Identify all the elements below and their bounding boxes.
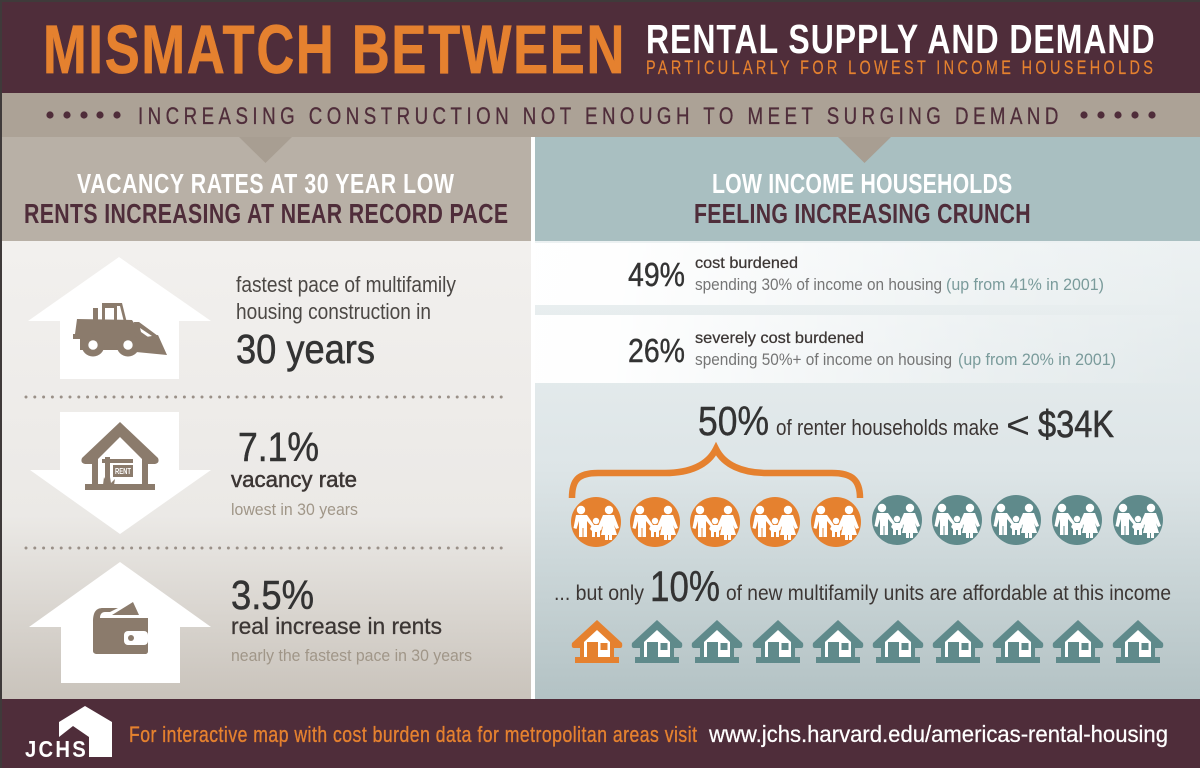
- row: 26% severely cost burdened: [535, 315, 1200, 383]
- text: vacancy rate: vacancy rate: [231, 467, 357, 492]
- teal house 2: [692, 620, 742, 663]
- banner pointer right: [838, 137, 891, 163]
- $34K: $34K: [1038, 404, 1114, 446]
- orange family 1: [571, 497, 621, 547]
- rest of sentence: of new multifamily units are affordable at this income: [726, 582, 1171, 605]
- panel: left body: [2, 241, 531, 699]
- icons: families: [571, 495, 1163, 547]
- footer: [0, 699, 1200, 768]
- teal house 9: [1113, 620, 1163, 663]
- teal house 4: [813, 620, 863, 663]
- rent sign text: RENT: [115, 467, 131, 476]
- banner dots left: [46, 111, 121, 119]
- teal house 6: [933, 620, 983, 663]
- orange family 2: [630, 497, 680, 547]
- left header line 2: RENTS INCREASING AT NEAR RECORD PACE: [24, 198, 508, 230]
- of renter households make: of renter households make: [776, 415, 999, 440]
- frame edge top: [0, 0, 1200, 2]
- teal house 1: [632, 620, 682, 663]
- comparison: (up from 41% in 2001): [946, 275, 1104, 294]
- teal house 3: [753, 620, 803, 663]
- text: 30 years: 30 years: [236, 326, 375, 372]
- banner: [0, 93, 1200, 163]
- stat: construction: [28, 257, 456, 379]
- title right: RENTAL SUPPLY AND DEMAND: [646, 16, 1155, 62]
- logo: JCHS: [25, 706, 112, 762]
- description: spending 50%+ of income on housing: [695, 350, 952, 369]
- orange family 4: [750, 497, 800, 547]
- text: 7.1%: 7.1%: [238, 424, 319, 470]
- text: 3.5%: 3.5%: [231, 572, 314, 618]
- label: severely cost burdened: [695, 330, 864, 347]
- headline: only 10% affordable: [554, 563, 1171, 611]
- teal house 5: [873, 620, 923, 663]
- banner dots right: [1080, 111, 1156, 119]
- panel: right body: [535, 241, 1200, 699]
- arrow up: [29, 562, 211, 683]
- dotted divider: [26, 546, 503, 550]
- arrow up: [28, 257, 211, 379]
- left header line 1: VACANCY RATES AT 30 YEAR LOW: [77, 168, 454, 200]
- icon: house for rent: [81, 422, 159, 490]
- right header line 2: FEELING INCREASING CRUNCH: [694, 198, 1031, 230]
- teal family 2: [932, 495, 982, 545]
- right header line 1: LOW INCOME HOUSEHOLDS: [712, 168, 1012, 200]
- comparison: (up from 20% in 2001): [958, 350, 1116, 369]
- text: lowest in 30 years: lowest in 30 years: [231, 500, 358, 519]
- teal house 7: [993, 620, 1043, 663]
- panel: left header: [2, 137, 531, 241]
- headline: 50% of renter households: [698, 398, 1114, 447]
- description: spending 30% of income on housing: [695, 275, 942, 294]
- panel divider: [531, 137, 535, 699]
- row: 49% cost burdened: [535, 243, 1200, 305]
- teal family 3: [991, 495, 1041, 545]
- icon: wallet: [93, 602, 148, 654]
- brace: [572, 449, 860, 498]
- title main: MISMATCH BETWEEN: [43, 11, 624, 88]
- 26%: 26%: [628, 332, 685, 369]
- teal house 8: [1053, 620, 1103, 663]
- footer call to action: For interactive map with cost burden data for metropolitan areas visit: [129, 723, 697, 748]
- less than: <: [1006, 405, 1030, 447]
- arrow down: [30, 412, 211, 534]
- 10%: 10%: [650, 563, 720, 611]
- orange family 5: [811, 497, 861, 547]
- 50%: 50%: [698, 398, 769, 444]
- title band: [0, 0, 1200, 93]
- text: real increase: real increase in rents: [231, 613, 442, 639]
- stat: rents: [29, 562, 472, 683]
- teal family 5: [1113, 495, 1163, 545]
- 49%: 49%: [628, 256, 685, 293]
- icons: houses: [572, 620, 1163, 663]
- orange family 3: [690, 497, 740, 547]
- frame edge left: [0, 0, 2, 768]
- teal family 1: [872, 495, 922, 545]
- banner text: INCREASING CONSTRUCTION NOT ENOUGH TO MEET SURGING DEMAND: [138, 103, 1058, 130]
- label: cost burdened: [695, 255, 798, 272]
- subtitle: PARTICULARLY FOR LOWEST INCOME HOUSEHOLDS: [646, 57, 1153, 79]
- orange house: [572, 620, 622, 663]
- logo text: JCHS: [25, 736, 86, 762]
- text: fastest pace: fastest pace of multifamily: [236, 272, 456, 297]
- banner pointer left: [239, 137, 292, 163]
- text: housing construction: housing construction in: [236, 299, 431, 324]
- stat: vacancy: [30, 412, 358, 534]
- but only: ... but only: [554, 582, 644, 605]
- dotted divider: [26, 396, 503, 398]
- footer url: www.jchs.harvard.edu/americas-rental-housing: [708, 721, 1168, 747]
- text: nearly fastest: nearly the fastest pace in 30 years: [231, 646, 472, 665]
- panel: right header: [535, 137, 1200, 241]
- teal family 4: [1052, 495, 1102, 545]
- icon: bulldozer: [73, 303, 167, 356]
